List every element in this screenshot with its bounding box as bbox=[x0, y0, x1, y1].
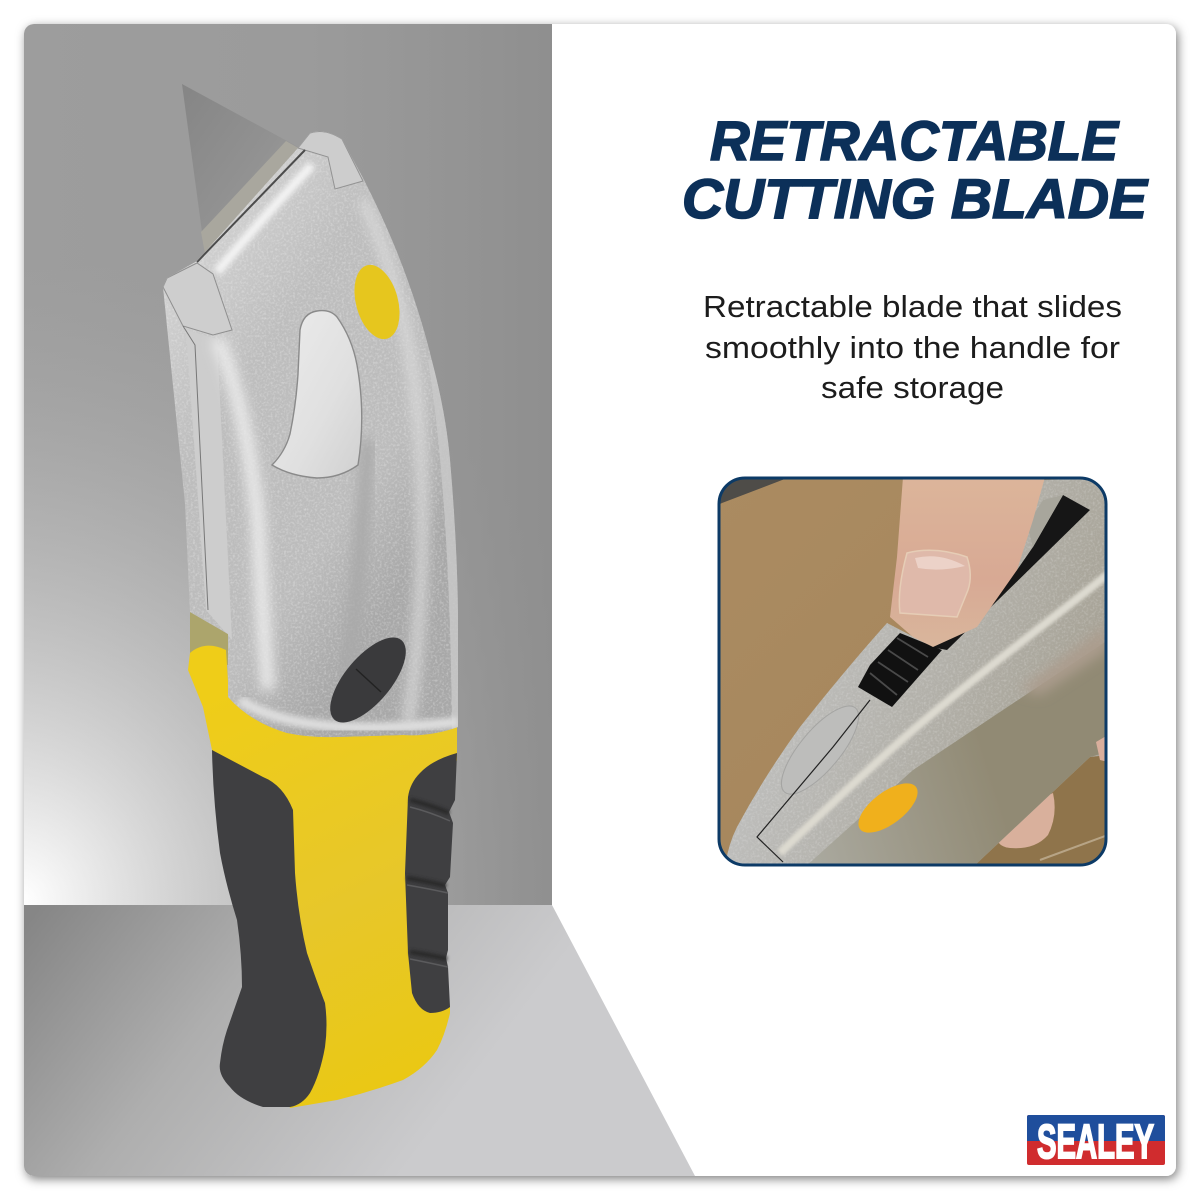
heading bbox=[682, 109, 1149, 230]
body text: Retractable blade that slides bbox=[703, 289, 1122, 324]
metal body bbox=[163, 132, 458, 738]
inset border bbox=[719, 478, 1106, 865]
lower finger bbox=[997, 793, 1055, 848]
pink reflection bbox=[1025, 631, 1104, 696]
shoulder piece bbox=[163, 263, 232, 335]
cardboard background bbox=[718, 477, 1108, 867]
yellow handle bbox=[188, 646, 457, 1108]
thumb slider bbox=[272, 311, 362, 478]
blade root strip bbox=[201, 141, 300, 254]
inset photo: thumb sliding the blade bbox=[718, 477, 1111, 867]
dark left grip bbox=[212, 750, 326, 1107]
blade bbox=[182, 84, 300, 254]
top slot bbox=[930, 495, 1090, 650]
knife body in hand bbox=[725, 478, 1108, 867]
panel: grey studio backdrop bbox=[24, 24, 695, 1176]
body text: safe storage bbox=[821, 370, 1004, 405]
nail highlight bbox=[915, 556, 965, 570]
yellow blade lock button bbox=[347, 260, 407, 344]
heading: CUTTING BLADE bbox=[682, 167, 1149, 230]
lower khaki face bbox=[805, 640, 1108, 867]
heading: RETRACTABLE bbox=[710, 109, 1120, 172]
body text bbox=[703, 289, 1122, 405]
panel seam bbox=[757, 700, 870, 862]
top corner piece bbox=[298, 131, 363, 189]
yellow button bbox=[858, 783, 918, 833]
highlight ridge bbox=[780, 571, 1111, 853]
handle spur bbox=[190, 612, 228, 665]
product: utility knife bbox=[150, 84, 470, 1108]
body text: smoothly into the handle for bbox=[705, 330, 1120, 365]
darker cardboard lower right bbox=[977, 756, 1104, 864]
dark right grip bbox=[405, 753, 457, 1013]
thumb bbox=[890, 477, 1045, 647]
black blade change button bbox=[317, 625, 419, 735]
thumb wheel bbox=[858, 633, 942, 707]
engraved oval bbox=[781, 706, 859, 794]
thumbnail bbox=[899, 550, 970, 617]
